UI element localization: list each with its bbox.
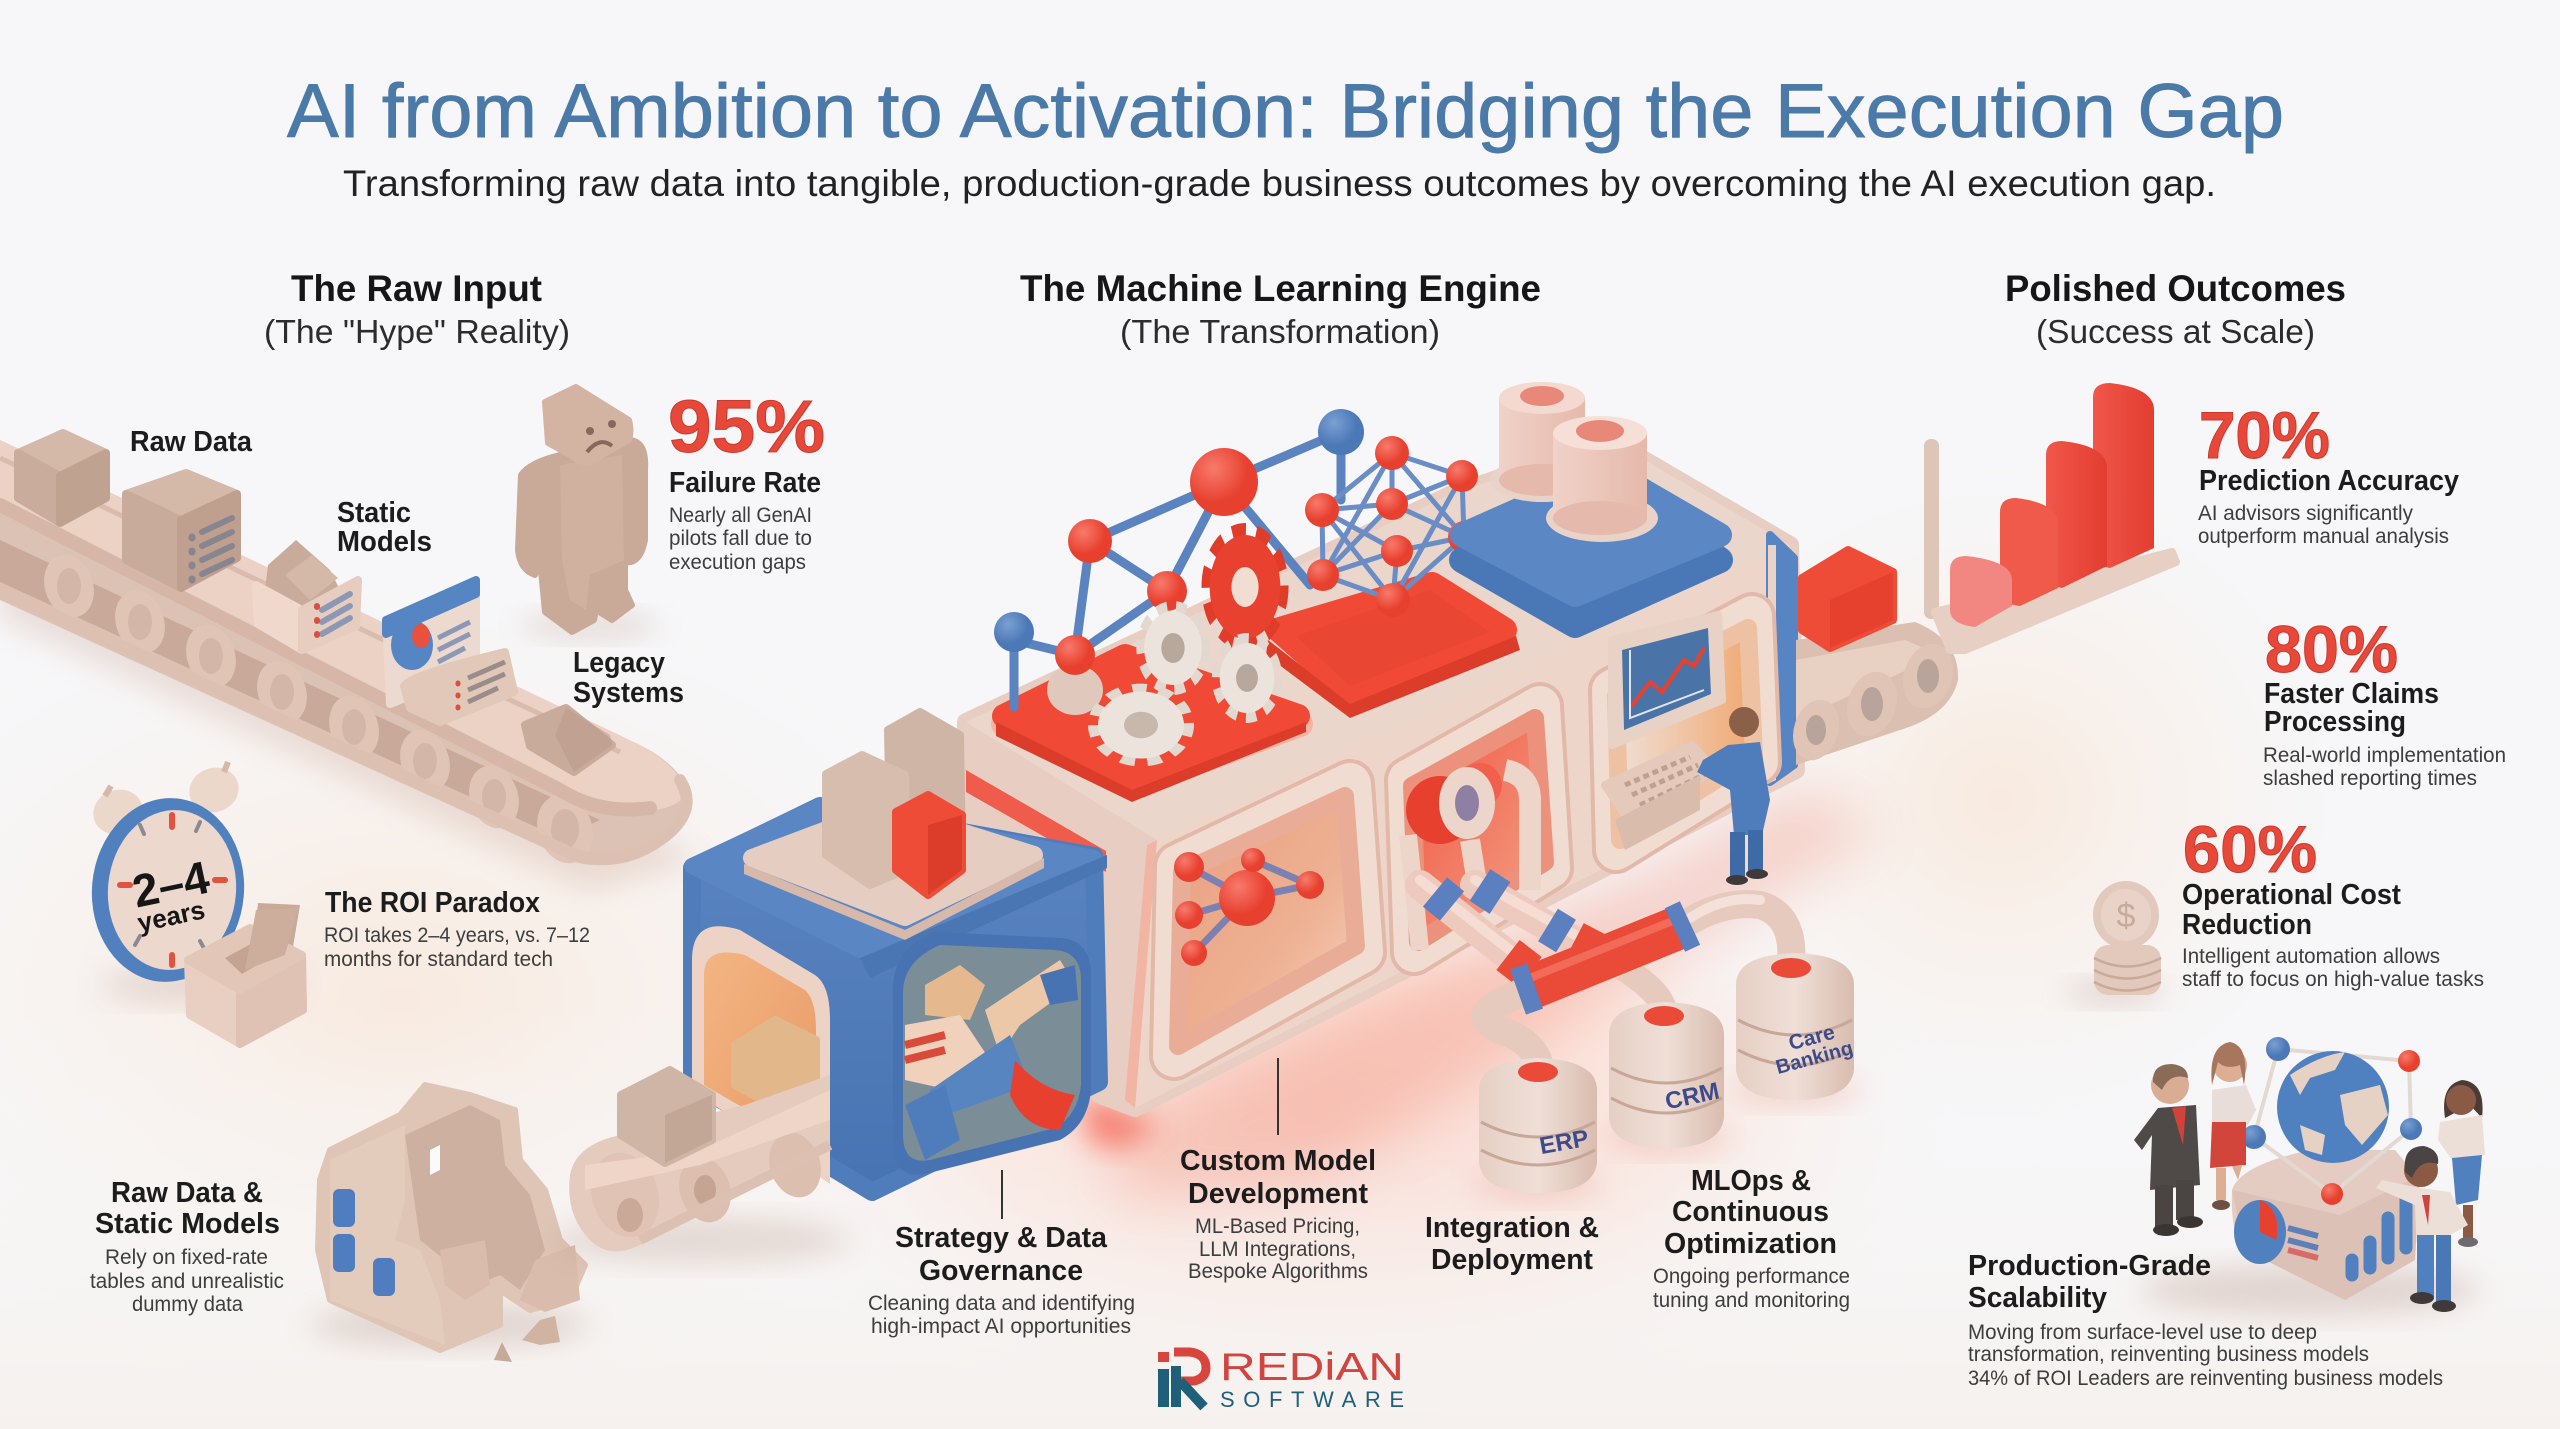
icon: alarm clock: [84, 761, 303, 1044]
text: Raw Data & Static Models: tables and unrealistic: [90, 1270, 284, 1293]
text: Production-Grade Scalability: [1968, 1250, 2443, 1390]
label: Legacy Systems: Systems: [573, 677, 684, 709]
stat: 95% failure rate: 95%: [668, 385, 825, 468]
cylinder: CRM: [1602, 1002, 1734, 1154]
machine top: red trays: [996, 585, 1520, 802]
figure: operator at keyboard: [1697, 707, 1770, 885]
stat: 60% cost reduction: staff to focus on high-value tasks: [2182, 968, 2484, 991]
logo: Redian Software: SOFTWARE: [1220, 1387, 1404, 1412]
gears: [1095, 531, 1283, 761]
icon: static models box: [256, 540, 358, 650]
text: Production-Grade Scalability: 34% of ROI Leaders are reinventing business models: [1968, 1367, 2443, 1390]
network and globe: [2242, 1037, 2422, 1205]
text: Custom Model Development: LLM Integrations,: [1199, 1238, 1356, 1261]
subtitle: Transforming raw data into tangible, production-grade business outcomes by overcoming the AI execution gap.: [343, 163, 2216, 204]
icon: alarm clock: years: [135, 894, 208, 938]
stat: 70% prediction accuracy: 70%: [2199, 398, 2330, 472]
title: AI from Ambition to Activation: Bridging the Execution Gap: [287, 69, 2284, 154]
stat: 60% cost reduction: 60%: [2183, 812, 2317, 886]
text: Strategy & Data Governance: Cleaning data and identifying: [868, 1292, 1135, 1315]
text: Custom Model Development: Custom Model: [1180, 1145, 1376, 1177]
stat: 80% faster claims: Real-world implementation: [2263, 744, 2506, 767]
right conveyor with red cube: [1785, 550, 1961, 766]
heading: The Raw Input: [264, 268, 570, 350]
text: MLOps & Continuous Optimization: tuning and monitoring: [1653, 1289, 1850, 1312]
heading: The Raw Input: (The "Hype" Reality): [264, 313, 570, 350]
label: Static Models: Static: [337, 497, 411, 529]
label: Legacy Systems: Legacy: [573, 647, 665, 679]
window: monitor and operator: [1605, 615, 1758, 850]
text: The ROI Paradox: [324, 887, 590, 971]
stat: 70% prediction accuracy: outperform manual analysis: [2198, 525, 2449, 548]
heading: The Machine Learning Engine: The Machine Learning Engine: [1020, 268, 1541, 309]
stat: 70% prediction accuracy: Prediction Accuracy: [2199, 465, 2459, 497]
text: Strategy & Data Governance: high-impact AI opportunities: [871, 1315, 1131, 1338]
conveyor: raw input belt: [0, 440, 700, 890]
label: Raw Data: Raw Data: [130, 426, 253, 458]
label: Legacy Systems: [573, 647, 684, 709]
icon: coin stack: $: [2117, 897, 2136, 935]
stat: 80% faster claims: [2263, 612, 2506, 790]
cylinder: ERP: ERP: [1537, 1125, 1591, 1160]
bar chart: [1924, 383, 2176, 650]
text: Raw Data & Static Models: dummy data: [132, 1293, 243, 1316]
text: Raw Data & Static Models: Rely on fixed-rate: [105, 1246, 268, 1269]
text: MLOps & Continuous Optimization: Continuous: [1672, 1196, 1829, 1228]
text: Production-Grade Scalability: Moving from surface-level use to deep: [1968, 1321, 2317, 1344]
pipes: [1420, 880, 1791, 1060]
text: MLOps & Continuous Optimization: Ongoing performance: [1653, 1265, 1850, 1288]
icon: alarm clock: 2–4: [128, 851, 214, 918]
cylinder: Care Banking: [1729, 953, 1861, 1106]
stat: 95% failure rate: [668, 385, 825, 574]
blocks on blue cube: [826, 712, 962, 895]
icon: legacy UI card and block: [386, 580, 612, 772]
heading: Polished Outcomes: Polished Outcomes: [2005, 268, 2346, 309]
text: The ROI Paradox: months for standard tech: [324, 948, 553, 971]
icon: raw data cube: [18, 433, 106, 523]
data box: [2232, 1150, 2420, 1300]
opening left: [692, 926, 830, 1184]
stat: 80% faster claims: Processing: [2264, 706, 2406, 738]
text: Custom Model Development: Bespoke Algorithms: [1188, 1260, 1368, 1283]
text: Custom Model Development: [1180, 1145, 1376, 1283]
stat: 95% failure rate: execution gaps: [669, 551, 806, 574]
heading: The Machine Learning Engine: (The Transformation): [1120, 313, 1440, 350]
machine top: blue block with chimneys: [1462, 382, 1720, 625]
stat: 60% cost reduction: Intelligent automation allows: [2182, 945, 2440, 968]
text: The ROI Paradox: The ROI Paradox: [325, 887, 540, 919]
stat: 95% failure rate: pilots fall due to: [669, 527, 812, 550]
cylinder: Care Banking: Care: [1786, 1021, 1837, 1055]
heading: Polished Outcomes: [2005, 268, 2346, 350]
machine: pale body with windows: [966, 440, 1880, 1200]
leader line: custom model: [1277, 1058, 1279, 1135]
icon: sad clay figure: [518, 387, 660, 639]
stat: 60% cost reduction: Reduction: [2182, 909, 2312, 941]
logo: Redian Software: [1158, 1346, 1404, 1412]
text: MLOps & Continuous Optimization: [1653, 1165, 1850, 1312]
window right: analyst: [893, 932, 1091, 1175]
leader line: strategy: [1001, 1170, 1003, 1219]
stat: 70% prediction accuracy: AI advisors significantly: [2198, 502, 2413, 525]
person: woman right: [2438, 1080, 2485, 1247]
icon: document cube: [126, 473, 237, 588]
stat: 60% cost reduction: Operational Cost: [2182, 879, 2401, 911]
stat: 80% faster claims: Faster Claims: [2264, 678, 2439, 710]
cylinder: CRM: CRM: [1663, 1078, 1722, 1115]
text: MLOps & Continuous Optimization: MLOps &: [1691, 1165, 1811, 1197]
text: Custom Model Development: Development: [1188, 1178, 1368, 1210]
window: pipework: [1406, 706, 1550, 952]
text: Production-Grade Scalability: Scalability: [1968, 1282, 2107, 1314]
neural network: [994, 409, 1480, 715]
logo: Redian Software: REDiAN: [1220, 1346, 1404, 1389]
text: Integration & Deployment: Integration &: [1425, 1212, 1599, 1244]
small conveyor entering machine: [550, 1070, 850, 1264]
cylinder: Care Banking: Banking: [1774, 1037, 1855, 1079]
window: molecule: [1174, 784, 1362, 1056]
label: Static Models: [337, 497, 432, 558]
stat: 95% failure rate: Nearly all GenAI: [669, 504, 812, 527]
machine: blue cube: [692, 712, 1107, 1192]
heading: Polished Outcomes: (Success at Scale): [2036, 313, 2315, 350]
text: MLOps & Continuous Optimization: Optimization: [1664, 1228, 1837, 1260]
text: Raw Data & Static Models: [90, 1177, 284, 1316]
text: Production-Grade Scalability: transformation, reinventing business models: [1968, 1343, 2369, 1366]
stat: 80% faster claims: slashed reporting times: [2263, 767, 2477, 790]
person: man pointing: [2376, 1146, 2468, 1312]
text: Strategy & Data Governance: Strategy & Data: [895, 1222, 1108, 1254]
cylinder: ERP: [1472, 1058, 1604, 1201]
text: Strategy & Data Governance: [868, 1222, 1135, 1338]
text: Integration & Deployment: [1425, 1212, 1599, 1276]
text: The ROI Paradox: ROI takes 2–4 years, vs. 7–12: [324, 924, 590, 947]
text: Raw Data & Static Models: Static Models: [95, 1208, 280, 1240]
icon: crumbling building: [310, 1085, 590, 1362]
label: Static Models: Models: [337, 526, 432, 558]
text: Production-Grade Scalability: Production-Grade: [1968, 1250, 2211, 1282]
stat: 80% faster claims: 80%: [2265, 612, 2398, 686]
text: Strategy & Data Governance: Governance: [919, 1255, 1083, 1287]
text: Raw Data & Static Models: Raw Data &: [111, 1177, 263, 1209]
text: Integration & Deployment: Deployment: [1431, 1244, 1593, 1276]
icon: coin stack: [2065, 881, 2165, 1004]
text: Custom Model Development: ML-Based Pricing,: [1195, 1215, 1360, 1238]
person: woman in red skirt: [2210, 1042, 2256, 1210]
stat: 60% cost reduction: [2182, 812, 2484, 991]
person: man in suit: [2134, 1064, 2203, 1236]
heading: The Machine Learning Engine: [1020, 268, 1541, 350]
heading: The Raw Input: The Raw Input: [291, 268, 542, 309]
scalability group illustration: [2134, 1037, 2485, 1316]
stat: 95% failure rate: Failure Rate: [669, 467, 821, 499]
stat: 70% prediction accuracy: [2198, 398, 2459, 548]
